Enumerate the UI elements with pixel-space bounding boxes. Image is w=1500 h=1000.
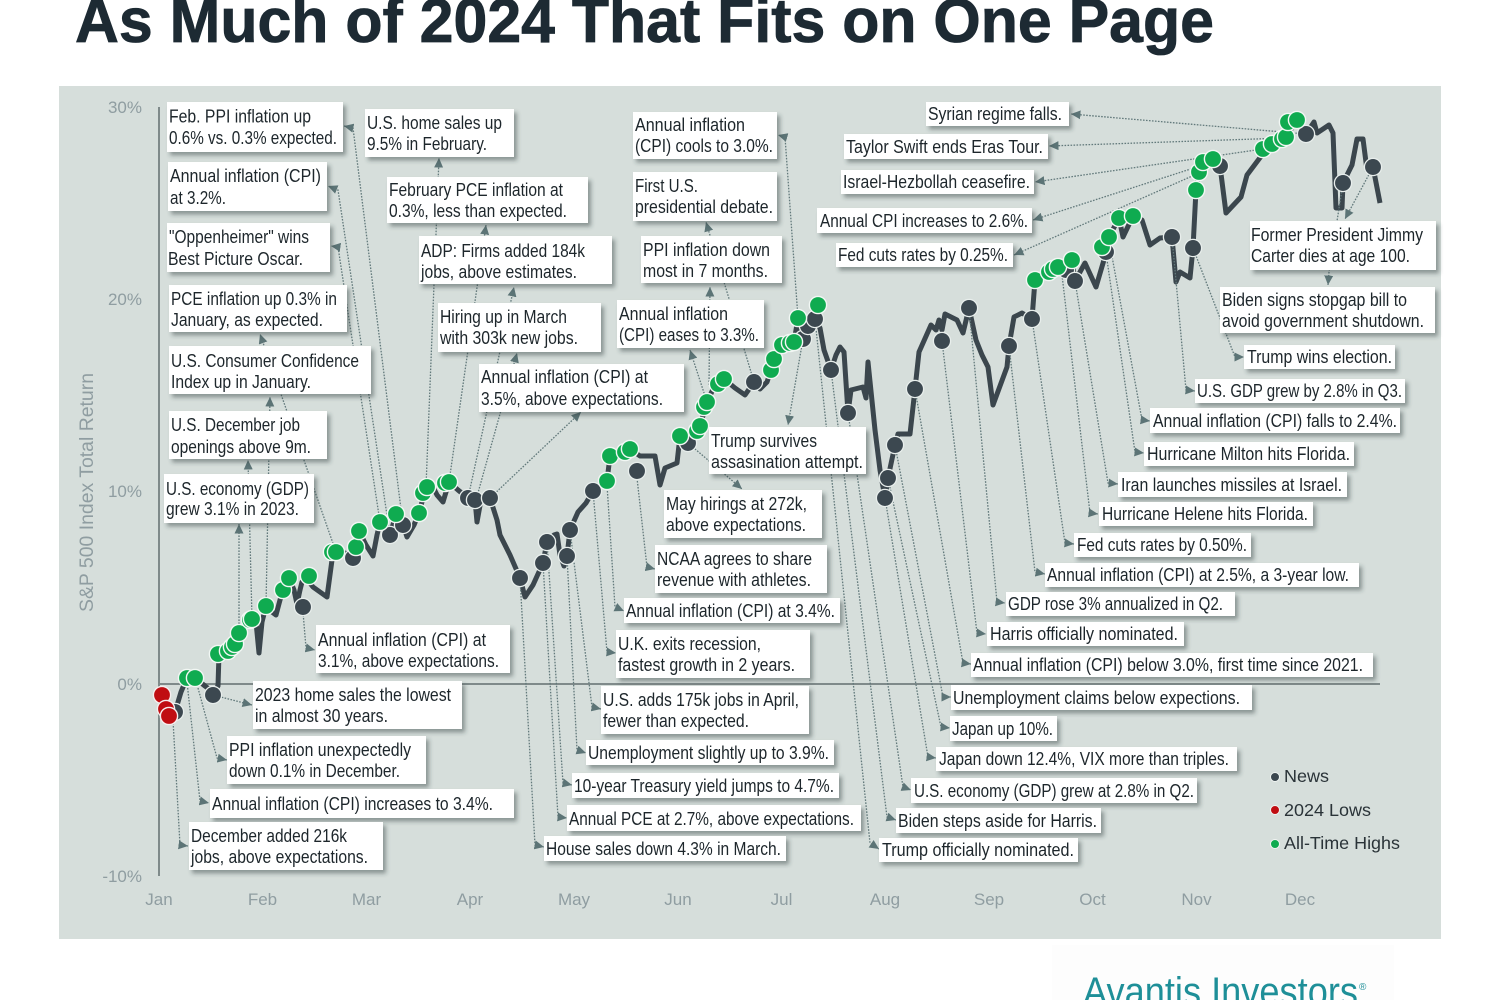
callout: Hiring March: with 303k new jobs. [439,328,578,348]
callout: December job openings: openings above 9m. [171,437,311,457]
callout: CPI 3.2%: Annual inflation (CPI) [170,166,321,186]
callout: PCE January [169,285,347,332]
callout: ADP [419,236,612,284]
S&P 500 line [169,120,1380,716]
callout: Japan up: Japan up 10%. [952,719,1053,739]
callout: U.K. recession: U.K. exits recession, [618,634,761,654]
callout: Oppenheimer: Best Picture Oscar. [168,249,303,269]
callout: Feb PPI: 0.6% vs. 0.3% expected. [169,128,337,148]
callout: CPI 3.5%: Annual inflation (CPI) at [481,367,648,387]
x axis labels: Jan [145,890,173,909]
callout: Trump nominated: Trump officially nominated. [882,840,1074,860]
x axis labels: Apr [457,890,484,909]
callout: home sales up [365,109,514,157]
callout: Biden stopgap [1220,287,1435,333]
callout: PPI down: PPI inflation down [643,240,770,260]
callout: Trump survives: Trump survives [711,431,817,451]
callout: Biden stopgap: Biden signs stopgap bill to [1222,290,1407,310]
callout: CPI 3.5% [479,364,684,412]
callout: CPI 3.2%: at 3.2%. [170,188,226,208]
callout: GDP Q3: U.S. GDP grew by 2.8% in Q3. [1197,381,1402,401]
callout: CPI 2.5%: Annual inflation (CPI) at 2.5%, a 3-year low. [1047,565,1349,585]
callout: PPI down: most in 7 months. [643,261,768,281]
callout: GDP 2023: U.S. economy (GDP) [166,479,309,499]
callout: Hurricane Milton: Hurricane Milton hits Florida. [1147,444,1350,464]
callout: CPI 2.6%: Annual CPI increases to 2.6%. [820,211,1028,231]
callout: Annual PCE [567,805,861,831]
callout: PCE January: PCE inflation up 0.3% in [171,289,337,309]
callout: CPI below 3%: Annual inflation (CPI) below 3.0%, first time since 2021. [973,655,1363,675]
callout: February PCE [387,177,588,223]
callout: U.K. recession [616,630,810,678]
callout: May hirings: above expectations. [666,515,806,535]
callout: CPI 3.1%: Annual inflation (CPI) at [318,630,486,650]
callout: PPI down [641,236,782,283]
callout: Iran missiles: Iran launches missiles at Israel. [1121,475,1342,495]
callout: ADP: jobs, above estimates. [420,262,577,282]
callout: Consumer Confidence: U.S. Consumer Confidence [171,351,359,371]
callout: CPI 3.1%: 3.1%, above expectations. [318,651,499,671]
callout: GDP Q2 [911,778,1197,803]
callout: PPI December [227,736,426,784]
callout: December job openings [169,411,327,459]
legend: 2024 Lows [1284,800,1371,820]
callout: GDP 2023 [164,474,314,523]
callout: Biden steps aside: Biden steps aside for Harris. [898,811,1097,831]
callout: Consumer Confidence [169,346,371,394]
callout: ADP: ADP: Firms added 184k [421,241,586,261]
y axis labels: -10% [102,867,142,886]
callout: CPI cools: (CPI) cools to 3.0%. [635,136,773,156]
callout: 175k jobs: fewer than expected. [603,711,749,731]
callout: Annual PCE: Annual PCE at 2.7%, above expectations. [569,809,854,829]
callout: Feb PPI [167,102,343,152]
callout: 2023 home sales [253,681,462,729]
callout: PPI December: PPI inflation unexpectedly [229,740,411,760]
callout: February PCE: 0.3%, less than expected. [389,201,567,221]
leader arrows [173,114,1373,849]
callout: December jobs: jobs, above expectations. [190,847,368,867]
axes [159,107,1380,876]
callout: CPI 3.2% [168,162,327,211]
callout: NCAA [655,545,827,593]
callout: December jobs: December added 216k [191,826,348,846]
callout: 2023 home sales: in almost 30 years. [255,706,388,726]
logo panel: ® [1359,982,1367,993]
news markers [166,125,1382,721]
callout: CPI eases [617,300,764,348]
x axis labels [145,890,1316,909]
callout: Feb PPI: Feb. PPI inflation up [169,106,311,126]
callout: CPI 3.4% [210,789,514,818]
callout: Trump wins: Trump wins election. [1247,347,1392,367]
2024 low markers [153,686,178,725]
callout: Taylor Swift: Taylor Swift ends Eras Tour. [846,137,1043,157]
callout: Harris nominated: Harris officially nominated. [990,624,1178,644]
callout: December job openings: U.S. December job [171,415,300,435]
callout: PPI December: down 0.1% in December. [229,761,400,781]
callout: GDP rose: GDP rose 3% annualized in Q2. [1008,594,1223,614]
y axis labels: 20% [108,290,142,309]
x axis labels: Feb [248,890,277,909]
callout: Jimmy Carter: Former President Jimmy [1251,225,1423,245]
callout: Jimmy Carter: Carter dies at age 100. [1251,246,1410,266]
callout: PCE January: January, as expected. [171,310,323,330]
callout: December jobs [189,822,383,870]
callout: NCAA: revenue with athletes. [657,570,811,590]
x axis labels: Oct [1079,890,1106,909]
callout: House sales: House sales down 4.3% in March. [546,839,781,859]
callout: Consumer Confidence: Index up in January. [171,372,311,392]
callout: Unemployment claims: Unemployment claims below expections. [953,688,1240,708]
callout: Hiring March [438,303,601,352]
callout: GDP 2023: grew 3.1% in 2023. [166,499,299,519]
callout: Trump survives: assasination attempt. [711,452,863,472]
legend [1270,766,1400,853]
callout: CPI 3.4%: Annual inflation (CPI) increases to 3.4%. [212,794,493,814]
callout: Oppenheimer: "Oppenheimer" wins [169,227,309,247]
callout: Oppenheimer [167,223,330,272]
callout: CPI eases: (CPI) eases to 3.3%. [619,325,759,345]
x axis labels: May [558,890,591,909]
legend: All-Time Highs [1284,833,1400,853]
callout: Treasury yield: 10-year Treasury yield jumps to 4.7%. [574,776,834,796]
x axis labels: Jul [771,890,792,909]
callout: 175k jobs: U.S. adds 175k jobs in April, [603,690,799,710]
callout: CPI 3.5%: 3.5%, above expectations. [481,389,663,409]
callout: Fed 0.25%: Fed cuts rates by 0.25%. [838,245,1008,265]
x axis labels: Aug [870,890,900,909]
callout: U.K. recession: fastest growth in 2 years. [618,655,795,675]
callout: home sales up: 9.5% in February. [367,134,487,154]
y axis labels: 30% [108,98,142,117]
callout: First debate [633,172,777,221]
callout: Hiring March: Hiring up in March [440,307,567,327]
callout: unemployment 3.9%: Unemployment slightly up to 3.9%. [588,743,829,763]
callout: CPI 2.4%: Annual inflation (CPI) falls to 2.4%. [1153,411,1397,431]
callout: Japan down: Japan down 12.4%, VIX more than triples. [939,749,1229,769]
y axis labels [102,98,142,886]
callout: February PCE: February PCE inflation at [389,180,563,200]
callout: Trump survives [709,427,866,474]
all-time high markers [178,111,1306,687]
callout: CPI eases: Annual inflation [619,304,728,324]
callout: home sales up: U.S. home sales up [367,113,502,133]
x axis labels: Dec [1285,890,1316,909]
y axis title: S&P 500 Index Total Return [77,373,98,612]
callout: Fed 0.50%: Fed cuts rates by 0.50%. [1077,535,1247,555]
callout: First debate: presidential debate. [635,197,773,217]
callout: May hirings: May hirings at 272k, [666,494,807,514]
callout: 2023 home sales: 2023 home sales the lowest [255,685,451,705]
callout: GDP Q2: U.S. economy (GDP) grew at 2.8% in Q2. [914,781,1194,801]
x axis labels: Mar [352,890,381,909]
x axis labels: Sep [974,890,1004,909]
y axis labels: 0% [117,675,142,694]
callout: CPI 3.4% June: Annual inflation (CPI) at 3.4%. [626,601,835,621]
callout: Syrian regime: Syrian regime falls. [928,104,1062,124]
callout: Jimmy Carter [1250,221,1436,270]
callout: NCAA: NCAA agrees to share [657,549,812,569]
callout: 175k jobs [601,686,809,734]
callout: May hirings [664,490,822,538]
callout: Israel-Hezbollah: Israel-Hezbollah ceasefire. [843,172,1030,192]
x axis labels: Jun [664,890,692,909]
callout: CPI cools: Annual inflation [635,115,745,135]
callout: First debate: First U.S. [635,176,698,196]
y axis labels: 10% [108,482,142,501]
legend: News [1284,766,1329,786]
logo panel [1052,945,1394,1000]
x axis labels: Nov [1181,890,1212,909]
callout: CPI 3.1% [316,625,510,673]
callout: Hurricane Helene: Hurricane Helene hits Florida. [1102,504,1308,524]
panel: chart background [59,86,1441,939]
callout: Biden stopgap: avoid government shutdown. [1222,311,1424,331]
callout: CPI cools [633,112,777,159]
